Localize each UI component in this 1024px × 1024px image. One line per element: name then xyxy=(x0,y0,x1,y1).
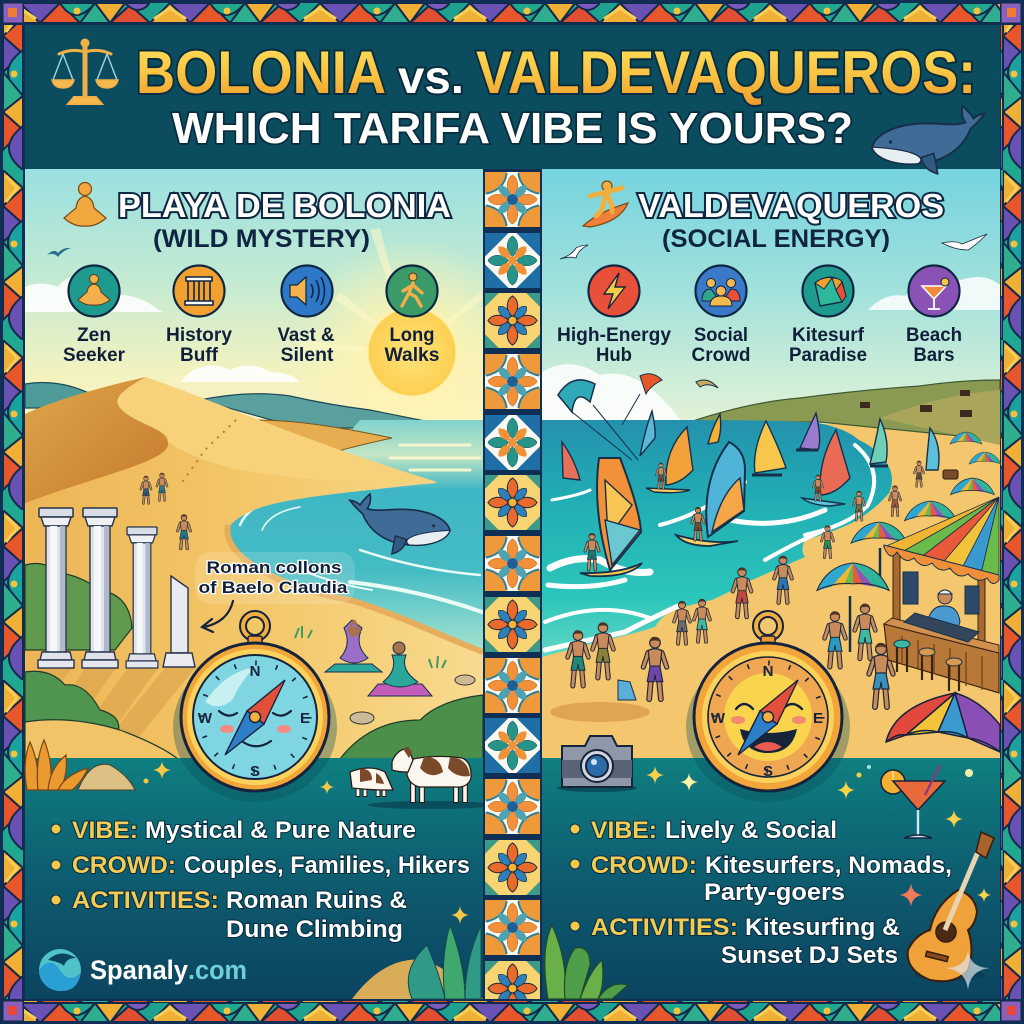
badge labels: Paradise xyxy=(789,345,867,366)
sparkles xyxy=(646,765,991,907)
badge labels: Zen xyxy=(77,325,111,346)
red sail xyxy=(820,430,850,495)
dune footprints xyxy=(180,420,236,485)
compass: serene face: E xyxy=(300,710,310,727)
beach crowd xyxy=(568,461,924,707)
rainbow canopy xyxy=(884,497,999,578)
large blue sail xyxy=(706,442,745,537)
badge: Social Crowd xyxy=(696,266,746,316)
dune shadow face xyxy=(25,377,168,503)
beach umbrellas xyxy=(817,432,1001,652)
azulejo tile column xyxy=(483,169,542,1016)
bullet list: Valdevaqueros: CROWD: xyxy=(591,852,697,879)
wet shoreline xyxy=(227,525,483,652)
icon: header whale xyxy=(872,106,985,174)
medium orange sail xyxy=(666,427,693,485)
bullet list: Valdevaqueros: Kitesurfers, Nomads, xyxy=(705,852,952,879)
callout: Roman columns label xyxy=(195,552,355,632)
logo: Spanaly.com xyxy=(39,949,247,991)
callout: Roman columns label: of Baelo Claudia xyxy=(198,578,348,597)
title line 2: WHICH TARIFA VIBE IS YOURS? xyxy=(172,104,853,153)
icon row: Valdevaqueros xyxy=(557,266,962,366)
cow and calf xyxy=(350,748,492,809)
sparkle watermark xyxy=(945,950,990,990)
badge: History Buff xyxy=(174,266,224,316)
icon: surfer xyxy=(583,181,628,227)
icon: whale in the bay xyxy=(350,494,450,554)
badge labels: Bars xyxy=(914,345,954,366)
sail riders xyxy=(585,463,823,570)
bullet list: Bolonia: Roman Ruins & xyxy=(226,887,407,914)
panel heading: Playa de Bolonia: PLAYA DE BOLONIA xyxy=(118,187,451,224)
callout: Roman columns label: Roman collons xyxy=(206,558,342,577)
cow legs xyxy=(413,780,465,803)
badge labels: Kitesurf xyxy=(792,325,865,346)
badge: Zen Seeker xyxy=(68,266,120,316)
yoga practitioners xyxy=(325,620,432,696)
clouds xyxy=(25,276,300,382)
calf xyxy=(358,785,384,797)
bullet list: Bolonia: VIBE: xyxy=(72,817,138,844)
bullet list: Valdevaqueros: ACTIVITIES: xyxy=(591,914,738,941)
compass: serene face xyxy=(173,614,337,802)
title line 1: BOLONIA xyxy=(136,39,386,106)
icon: sun xyxy=(367,307,457,397)
bullet list: Valdevaqueros: Lively & Social xyxy=(665,817,837,844)
icon: camera xyxy=(557,736,637,792)
compass: laughing face: W xyxy=(711,710,726,727)
surf xyxy=(545,445,874,650)
bullet list: Valdevaqueros: Kitesurfing & xyxy=(745,914,900,941)
compass: serene face: N xyxy=(250,663,260,680)
icon: bird xyxy=(47,248,71,257)
badge labels: Long xyxy=(390,325,434,346)
foreground rocks and grass xyxy=(295,626,475,724)
cow body xyxy=(407,756,471,787)
panel: Valdevaqueros facts xyxy=(542,736,1000,999)
small far sails xyxy=(562,442,580,480)
counter xyxy=(884,624,999,693)
title line 1 xyxy=(136,39,976,106)
panel: Valdevaqueros scene xyxy=(542,169,1001,790)
badge labels xyxy=(557,325,962,366)
windsurfers xyxy=(562,411,939,576)
badge labels: Beach xyxy=(906,325,962,346)
clouds xyxy=(542,277,1000,420)
title line 1: VALDEVAQUEROS: xyxy=(476,39,976,106)
sand mound with bottle xyxy=(550,680,650,722)
badge labels: Seeker xyxy=(63,345,126,366)
icon: seagulls xyxy=(560,234,987,259)
bullet list: Bolonia: Dune Climbing xyxy=(226,916,403,943)
column shadows xyxy=(25,668,195,748)
badge labels: Hub xyxy=(596,345,632,366)
badge labels xyxy=(63,325,440,366)
badge: Beach Bars xyxy=(908,266,960,316)
large orange sail xyxy=(597,458,641,570)
bullet list: Bolonia: Couples, Families, Hikers xyxy=(184,852,470,879)
logo: Spanaly.com: .com xyxy=(188,955,247,985)
arrow to the columns xyxy=(202,601,233,632)
distant mountains xyxy=(25,382,460,428)
bush behind the columns xyxy=(25,564,132,650)
badge: High-Energy Hub xyxy=(588,266,640,316)
header band xyxy=(25,25,1000,169)
icon: meditating figure xyxy=(64,182,106,226)
sea xyxy=(542,420,892,657)
icon row: Bolonia xyxy=(63,266,440,366)
bullet list: Bolonia: Mystical & Pure Nature xyxy=(145,817,416,844)
panel heading: Playa de Bolonia xyxy=(47,182,451,257)
plant, lower left xyxy=(545,925,628,999)
badge labels: Silent xyxy=(280,345,334,366)
plant and sand mound, lower right xyxy=(352,925,483,999)
panel heading: Valdevaqueros: VALDEVAQUEROS xyxy=(638,187,944,224)
badge labels: High-Energy xyxy=(557,325,671,346)
compass: laughing face: N xyxy=(763,663,773,680)
badge labels: History xyxy=(166,325,232,346)
cow head xyxy=(392,748,413,772)
panel: Bolonia facts xyxy=(25,740,492,999)
icon: balance scales xyxy=(52,40,118,104)
bullet list: Valdevaqueros xyxy=(570,817,952,969)
foreground umbrella xyxy=(886,693,1000,790)
icon: guitar xyxy=(908,832,994,981)
Roman columns xyxy=(38,508,195,668)
beach bar and DJ booth xyxy=(884,497,999,693)
panel: Playa de Bolonia scene xyxy=(25,169,527,760)
bullet list: Valdevaqueros: VIBE: xyxy=(591,817,657,844)
badge labels: Vast & xyxy=(278,325,335,346)
logo: Spanaly.com: Spanaly xyxy=(90,955,188,985)
badge labels: Social xyxy=(694,325,748,346)
DJ xyxy=(928,606,960,636)
sparkles xyxy=(144,761,469,924)
surf lines xyxy=(240,445,482,612)
panel heading: Valdevaqueros: (SOCIAL ENERGY) xyxy=(662,225,890,253)
sky xyxy=(25,169,483,424)
panel heading: Playa de Bolonia: (WILD MYSTERY) xyxy=(153,225,370,253)
kites xyxy=(558,374,718,460)
green hills with cattle xyxy=(690,380,1000,445)
compass: serene face: S xyxy=(250,763,260,780)
stools xyxy=(897,645,959,691)
compass: laughing face: E xyxy=(813,710,823,727)
far dune xyxy=(255,420,392,453)
foreground orange plant and rock xyxy=(25,740,135,790)
sky xyxy=(542,169,1000,424)
bullet list: Valdevaqueros: Party-goers xyxy=(704,879,845,906)
title line 1: vs. xyxy=(398,51,464,103)
main dune xyxy=(25,377,483,760)
bullet list: Valdevaqueros: Sunset DJ Sets xyxy=(721,942,898,969)
foreground bushes and dune xyxy=(25,671,483,760)
badge labels: Buff xyxy=(180,345,219,366)
bullet list: Bolonia: CROWD: xyxy=(72,852,176,879)
badge labels: Crowd xyxy=(692,345,750,366)
bullet list: Bolonia: ACTIVITIES: xyxy=(72,887,219,914)
icon: martini glass xyxy=(881,765,945,838)
badge: Long Walks xyxy=(386,266,438,316)
compass: laughing face xyxy=(686,614,850,802)
compass: serene face: W xyxy=(198,710,213,727)
cow on the sand xyxy=(943,470,958,479)
hikers on the dune xyxy=(141,473,190,549)
bullet list: Bolonia xyxy=(51,817,470,943)
sun rays and halo xyxy=(297,228,527,467)
badge: Vast & Silent xyxy=(282,266,332,316)
sea xyxy=(227,420,483,652)
badge: Kitesurf Paradise xyxy=(802,266,854,316)
compass: laughing face: S xyxy=(763,763,773,780)
badge labels: Walks xyxy=(384,345,440,366)
panel heading: Valdevaqueros xyxy=(560,181,987,259)
